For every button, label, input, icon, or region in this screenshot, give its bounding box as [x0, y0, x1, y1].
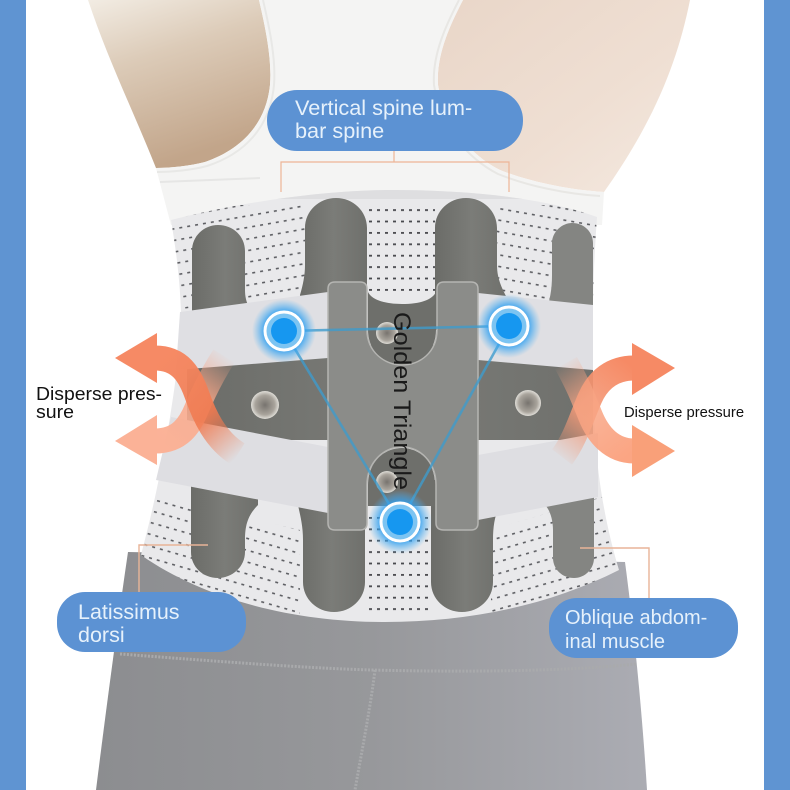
callout: vertical spine lumbar spine [267, 90, 523, 151]
callout: oblique abdominal muscle [549, 598, 738, 658]
strap: lower [156, 417, 598, 520]
center H-shaped plate [328, 282, 478, 530]
callout: latissimus dorsi: Latissimus [78, 600, 180, 624]
pad: lower inner left [298, 480, 365, 612]
pad: upper inner right [435, 198, 508, 330]
callout: oblique abdominal muscle: Oblique abdom- [565, 607, 707, 629]
model: left back skin [88, 0, 270, 168]
callout: vertical spine lumbar spine: bar spine [295, 118, 384, 143]
strap: upper [176, 292, 593, 370]
pad: lower outer right [545, 470, 594, 578]
arrows: right pair [562, 343, 675, 477]
pad: upper outer right [545, 223, 593, 345]
marker: bottom point [368, 490, 432, 554]
arrow: lower right [566, 363, 675, 477]
label: disperse pressure right: Disperse pressure [624, 405, 744, 421]
arrow: upper right [562, 343, 675, 457]
notch fill: top [368, 292, 436, 364]
label: disperse pressure left: Disperse pres- [36, 384, 162, 404]
model: white tank top [156, 0, 604, 225]
pad: lower inner right [431, 480, 500, 612]
model: right back skin [438, 0, 690, 192]
snap: bottom [376, 471, 398, 493]
leader lines: right callout [580, 548, 649, 598]
callout: vertical spine lumbar spine: Vertical spine lum- [295, 95, 472, 120]
belt: grey support pads [187, 198, 594, 612]
belt: mesh body [130, 185, 630, 630]
pad: upper outer left [192, 225, 258, 345]
pad: upper inner left [300, 198, 367, 330]
callout: latissimus dorsi: dorsi [78, 623, 125, 647]
arrow: lower left [115, 356, 224, 465]
label: disperse pressure left: sure [36, 402, 74, 422]
notch fill: bottom [368, 448, 435, 506]
snap: top [376, 322, 398, 344]
callout: oblique abdominal muscle: inal muscle [565, 631, 665, 653]
pad: lower outer left [191, 470, 258, 578]
marker: right point [477, 294, 541, 358]
belt: side mesh buttons [251, 390, 541, 419]
golden triangle lines [284, 326, 509, 522]
pad: middle band [187, 345, 593, 440]
leader lines: left callout [139, 545, 208, 592]
arrow: upper left [115, 333, 238, 454]
side band: right [764, 0, 790, 790]
arrows: left pair [115, 333, 238, 465]
label: Golden Triangle: Golden Triangle [388, 312, 415, 490]
callout: latissimus dorsi [57, 592, 246, 652]
leader lines: top callout [281, 151, 509, 192]
model: leggings [96, 552, 647, 790]
marker: left point [252, 299, 316, 363]
side band: left [0, 0, 26, 790]
